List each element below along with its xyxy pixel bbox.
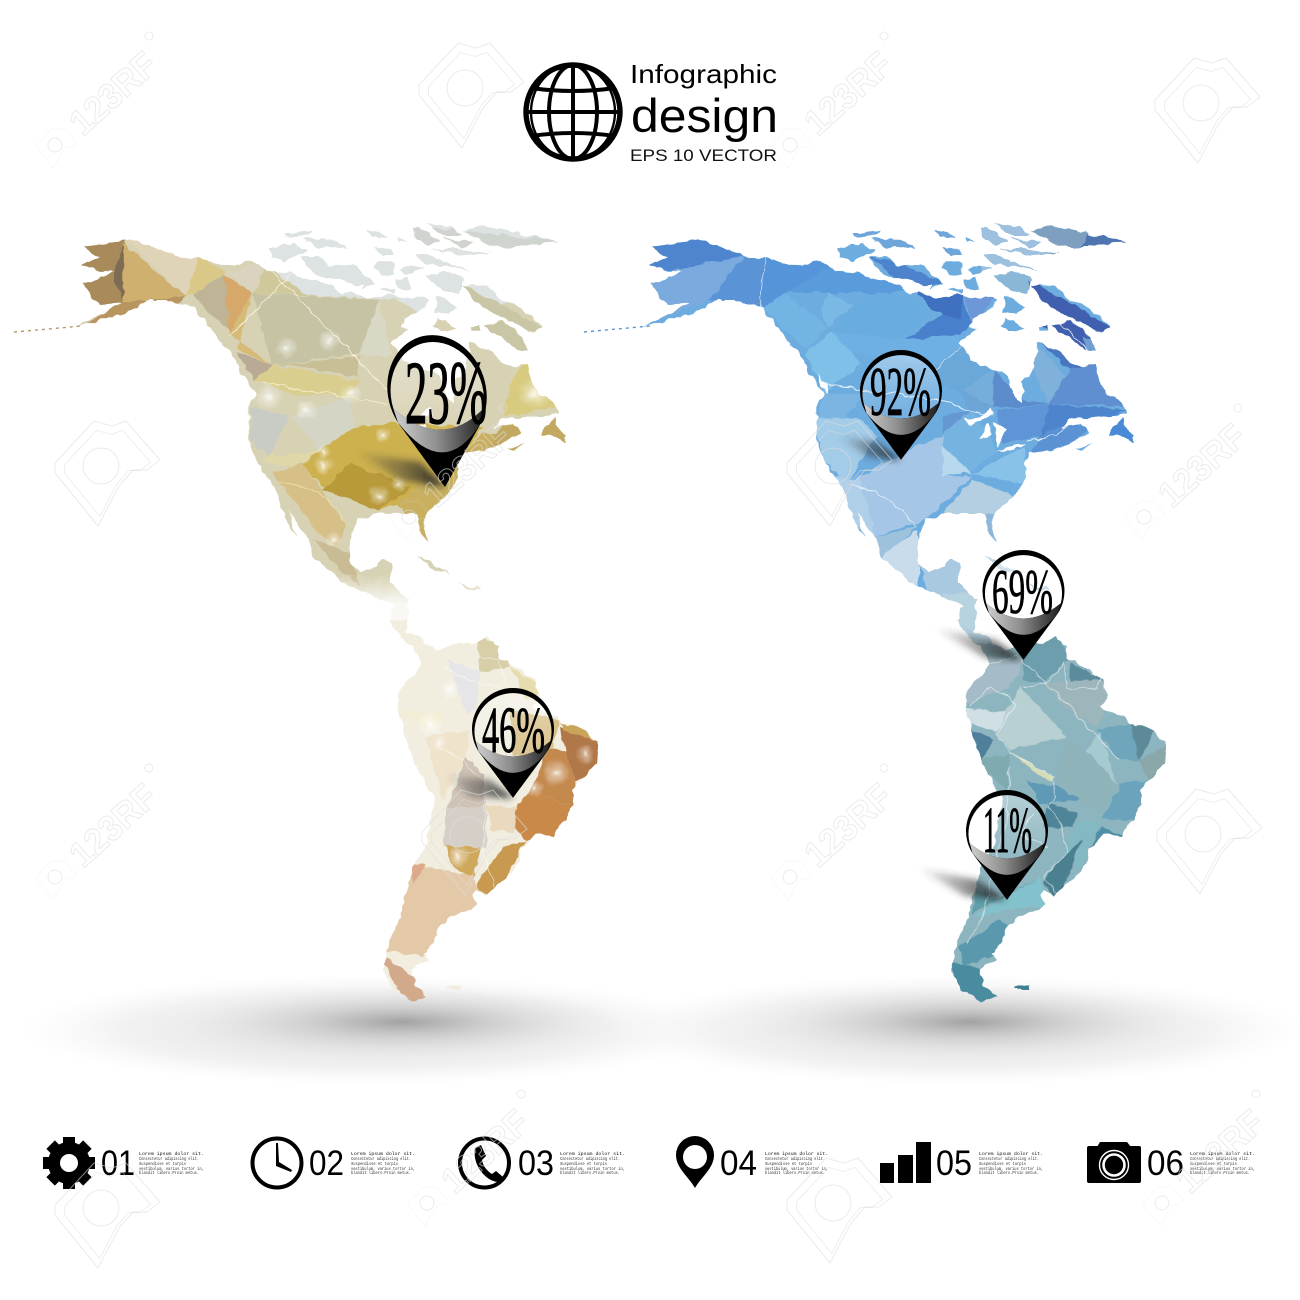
- lorem text: vestibulum, varius tortor in,: [1190, 1167, 1255, 1172]
- lorem text: Suspendisse et turpis: [1190, 1162, 1237, 1167]
- lorem text: vestibulum, varius tortor in,: [979, 1167, 1043, 1172]
- lorem text: [351, 1152, 415, 1176]
- ground shadow: [20, 975, 1300, 1085]
- pin: 23%: [355, 335, 494, 487]
- legend 01: [43, 1137, 204, 1189]
- legend 03: [460, 1138, 625, 1188]
- legend 05: [880, 1142, 1043, 1183]
- pin body: [472, 688, 554, 798]
- icon: phone: [460, 1138, 509, 1188]
- number 06: 06: [1147, 1144, 1184, 1183]
- icon: clock: [252, 1138, 302, 1188]
- lorem text: blandit libero.Proin metus.: [979, 1171, 1039, 1176]
- pin: 92%: [838, 350, 942, 460]
- blue Aleutian islands: [584, 326, 650, 332]
- blue North America facets: [643, 224, 1134, 620]
- lorem text: Lorem ipsum dolor sit.: [1190, 1152, 1255, 1157]
- title: Infographic: Infographic: [630, 59, 777, 89]
- icon: globe: [526, 65, 620, 159]
- pin: 11%: 11%: [983, 794, 1032, 867]
- legend 02: [252, 1138, 415, 1188]
- subtitle: EPS 10 VECTOR: EPS 10 VECTOR: [630, 146, 777, 165]
- lorem text: vestibulum, varius tortor in,: [765, 1167, 828, 1172]
- legend 06: [1087, 1142, 1255, 1183]
- legend 04: [676, 1136, 828, 1188]
- pin shadow: [355, 452, 445, 487]
- lorem text: Lorem ipsum dolor sit.: [979, 1152, 1043, 1157]
- lorem text: blandit libero.Proin metus.: [765, 1171, 825, 1176]
- lorem text: Consectetur adipiscing elit.: [1190, 1157, 1250, 1162]
- pin shadow: [917, 868, 1006, 900]
- pin body: [982, 550, 1064, 660]
- title: design: design: [631, 89, 778, 142]
- blue faceted land: [643, 224, 1166, 1002]
- pin shadow: [838, 436, 900, 460]
- lorem text: [139, 1152, 204, 1176]
- map: blue Americas: [580, 220, 1177, 1008]
- lorem text: Consectetur adipiscing elit.: [979, 1157, 1039, 1162]
- lorem text: [1190, 1152, 1255, 1176]
- pin shadow: [445, 775, 513, 798]
- lorem text: [560, 1152, 625, 1176]
- number 04: 04: [720, 1144, 757, 1183]
- number 03: 03: [518, 1144, 554, 1183]
- pin body: [966, 790, 1048, 900]
- pin: 11%: [917, 790, 1048, 900]
- lorem text: Lorem ipsum dolor sit.: [560, 1152, 625, 1157]
- lorem text: Lorem ipsum dolor sit.: [351, 1152, 415, 1157]
- lorem text: Lorem ipsum dolor sit.: [765, 1152, 828, 1157]
- number 01: 01: [101, 1144, 135, 1183]
- pin value: 69%: [992, 556, 1053, 627]
- pin: 46%: [445, 688, 554, 798]
- lorem text: [765, 1152, 828, 1176]
- lorem text: Consectetur adipiscing elit.: [765, 1157, 825, 1162]
- lorem text: [979, 1152, 1043, 1176]
- lorem text: blandit libero.Proin metus.: [139, 1171, 199, 1176]
- legend row: [43, 1136, 1255, 1189]
- gold central fade: [339, 576, 481, 621]
- watermark stamps: 123RF: [61, 44, 165, 143]
- pin body: [383, 335, 494, 487]
- icon: gear: [43, 1137, 95, 1189]
- title block: [526, 59, 778, 165]
- lorem text: blandit libero.Proin metus.: [351, 1171, 411, 1176]
- number 02: 02: [309, 1144, 344, 1183]
- watermark stamps: 123RF: [796, 776, 900, 875]
- lorem text: blandit libero.Proin metus.: [1190, 1171, 1250, 1176]
- pin: 92%: 92%: [870, 354, 931, 431]
- gold South America facets: [383, 619, 598, 1002]
- lorem text: Consectetur adipiscing elit.: [351, 1157, 411, 1162]
- watermark stamps: 123RF: [415, 416, 519, 515]
- lorem text: vestibulum, varius tortor in,: [139, 1167, 204, 1172]
- pin value: 46%: [482, 694, 545, 767]
- number 05: 05: [936, 1144, 972, 1183]
- pin shadow: [933, 628, 1023, 660]
- pin: 69%: [933, 550, 1064, 660]
- watermark stamps: 123RF: [796, 44, 900, 143]
- watermark stamps: 123RF: [433, 1102, 537, 1201]
- lorem text: Suspendisse et turpis: [765, 1162, 812, 1167]
- lorem text: vestibulum, varius tortor in,: [351, 1167, 415, 1172]
- lorem text: blandit libero.Proin metus.: [560, 1171, 620, 1176]
- map: gold Americas: [14, 220, 637, 1007]
- pin body: [860, 350, 942, 460]
- watermark stamps: 123RF: [1150, 416, 1254, 515]
- gold North America facets: [75, 224, 566, 621]
- lorem text: Suspendisse et turpis: [139, 1162, 186, 1167]
- lorem text: vestibulum, varius tortor in,: [560, 1167, 625, 1172]
- lorem text: Suspendisse et turpis: [351, 1162, 398, 1167]
- blue South America facets: [943, 593, 1177, 1008]
- icon: location pin: [676, 1136, 714, 1188]
- lorem text: Consectetur adipiscing elit.: [139, 1157, 199, 1162]
- pin: 23%: 23%: [405, 344, 487, 443]
- gold Aleutian islands: [14, 326, 82, 332]
- lorem text: Consectetur adipiscing elit.: [560, 1157, 620, 1162]
- icon: bars: [880, 1142, 931, 1183]
- watermark stamps: 123RF: [61, 776, 165, 875]
- lorem text: Lorem ipsum dolor sit.: [139, 1152, 204, 1157]
- watermark stamps: 123RF: [1168, 1102, 1272, 1201]
- lorem text: Suspendisse et turpis: [979, 1162, 1026, 1167]
- icon: camera: [1087, 1142, 1141, 1183]
- gold faceted land: [75, 224, 598, 1002]
- lorem text: Suspendisse et turpis: [560, 1162, 607, 1167]
